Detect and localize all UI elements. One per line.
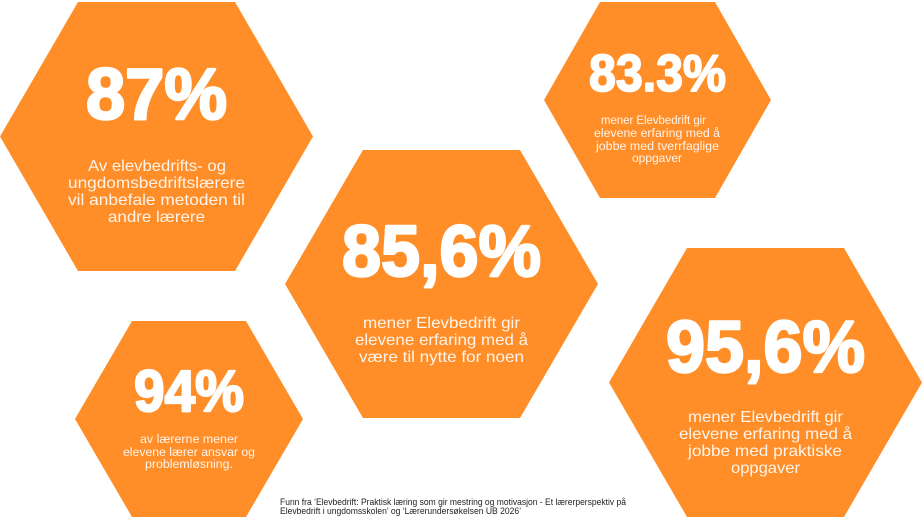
- text: 94% description: problemløsning.: [145, 457, 233, 471]
- panel: 94% hexagon: [75, 321, 303, 517]
- text: 87% description: andre lærere: [108, 209, 205, 226]
- panel: 83.3% hexagon: [544, 2, 771, 198]
- text: 87% description: ungdomsbedriftslærere: [68, 175, 245, 192]
- statistic: 95,6%: 95,6%: [666, 307, 865, 388]
- statistic: 87%: 87%: [86, 55, 227, 135]
- text: 87% description: vil anbefale metoden til: [68, 192, 245, 209]
- panel: 85,6% hexagon: [285, 150, 598, 418]
- text: 94% description: av lærerne mener: [140, 432, 238, 446]
- text: 83.3% description: mener Elevbedrift gir: [601, 113, 706, 127]
- text: 85,6% description: mener Elevbedrift gir: [363, 315, 521, 332]
- statistic: 85,6%: 85,6%: [342, 212, 541, 292]
- text: 95,6% description: [679, 409, 852, 477]
- panel: 87% hexagon: [0, 2, 313, 271]
- text: 95,6% description: jobbe med praktiske: [687, 443, 842, 460]
- text: 95,6% description: elevene erfaring med å: [679, 425, 852, 443]
- text: 94% description: elevene lærer ansvar og: [123, 445, 255, 459]
- source note: [280, 497, 627, 516]
- text: 87% description: Av elevbedrifts- og: [88, 158, 226, 175]
- text: 83.3% description: [594, 113, 720, 165]
- text: 83.3% description: oppgaver: [632, 151, 682, 165]
- source note: Funn fra ‘Elevbedrift: Praktisk læring som gir mestring og motivasjon - Et lærerperspektiv på: [280, 497, 627, 507]
- statistic: 83.3%: 83.3%: [589, 45, 726, 103]
- text: 85,6% description: [355, 315, 528, 366]
- text: 95,6% description: mener Elevbedrift gir: [688, 409, 844, 426]
- statistic: 94%: 94%: [134, 359, 244, 424]
- text: 83.3% description: elevene erfaring med å: [594, 126, 720, 140]
- source note: Elevbedrift i ungdomsskolen’ og ‘Lærerundersøkelsen UB 2026’: [280, 506, 521, 516]
- text: 85,6% description: være til nytte for noen: [359, 349, 524, 366]
- text: 85,6% description: elevene erfaring med å: [355, 331, 528, 349]
- text: 83.3% description: jobbe med tverrfaglige: [595, 139, 719, 153]
- text: 87% description: [68, 158, 245, 226]
- panel: 95,6% hexagon: [609, 248, 922, 517]
- text: 94% description: [123, 432, 255, 471]
- text: 95,6% description: oppgaver: [731, 460, 801, 477]
